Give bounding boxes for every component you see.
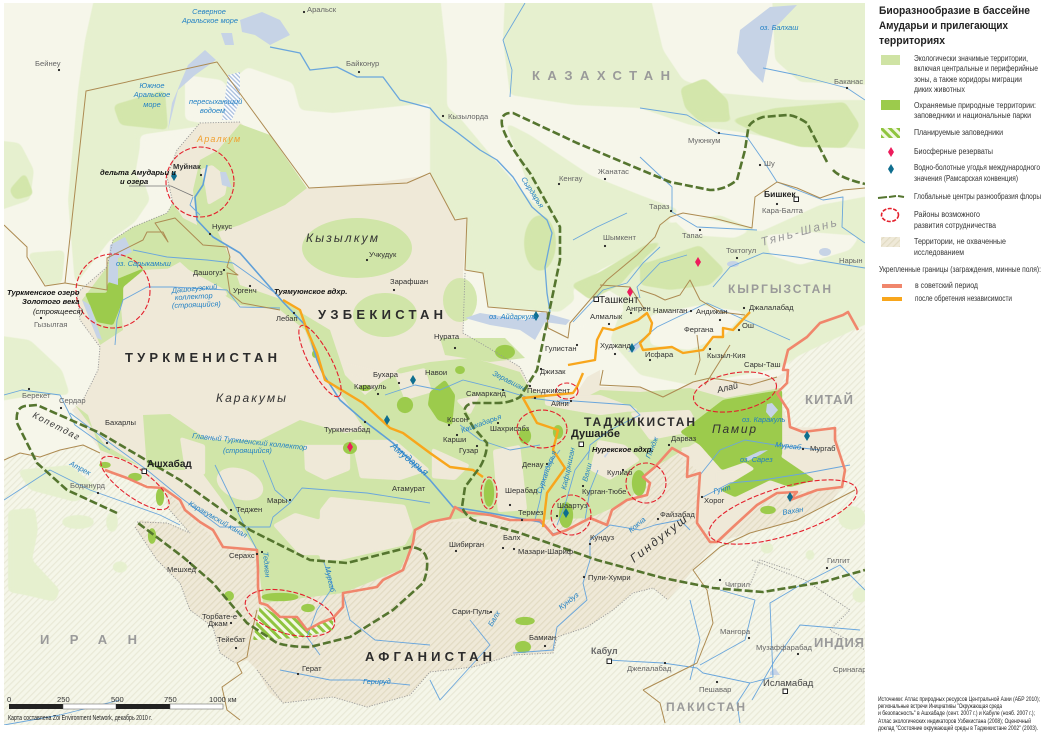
- city labels: Лебап: [276, 314, 298, 323]
- city labels: Нукус: [212, 222, 232, 231]
- city labels: Сари-Пуль: [452, 607, 490, 616]
- city labels: Кенгау: [559, 174, 583, 183]
- water labels: оз. Балхаш: [760, 23, 798, 32]
- city labels: Сердар: [59, 396, 86, 405]
- inner kyzylkum green: [302, 218, 477, 337]
- city markers: [28, 11, 848, 683]
- legend item: ecologically significant: диких животных: [914, 85, 965, 94]
- water labels: водоем: [200, 106, 225, 115]
- country names: АФГАНИСТАН: [365, 649, 492, 664]
- water labels: оз. Сарыкамыш: [116, 259, 171, 268]
- city labels: Герат: [302, 664, 322, 673]
- water labels: (строящийся): [223, 446, 272, 455]
- city labels: Кундуз: [590, 533, 615, 542]
- city labels: Исламабад: [763, 678, 814, 689]
- water labels: Сырдарья: [519, 175, 546, 210]
- city labels: Бамиан: [529, 633, 556, 642]
- water labels: Атрек: [67, 458, 93, 478]
- city labels: Шахрисабз: [490, 424, 530, 433]
- legend item: biosphere reserves: [888, 147, 993, 157]
- region names: Тянь-Шань: [759, 215, 838, 249]
- projects labels: Золотого века: [22, 297, 79, 306]
- city labels: Нурата: [434, 332, 460, 341]
- legend item: protected areas: заповедники и национальные парки: [914, 111, 1031, 120]
- city labels: Байконур: [346, 59, 379, 68]
- legend item: not studied: Территории, не охваченные: [914, 237, 1006, 246]
- region names: Каракумы: [216, 391, 286, 405]
- region names: Памир: [712, 422, 756, 436]
- protected areas bright green: [85, 267, 815, 653]
- city labels: Джелалабад: [627, 664, 672, 673]
- city labels: Файзабад: [660, 510, 695, 519]
- water labels: [67, 7, 804, 686]
- projects labels: дельта Амударьи и: [100, 168, 176, 177]
- city labels: Навои: [425, 368, 447, 377]
- city labels: Мешхед: [167, 565, 196, 574]
- city labels: Фергана: [684, 325, 714, 334]
- city labels: Токтогул: [726, 246, 756, 255]
- city labels: Боджнурд: [70, 481, 106, 490]
- biosphere reserves: [347, 257, 701, 452]
- city labels: Гузар: [459, 446, 478, 455]
- legend item: cooperation areas: [882, 208, 996, 230]
- city labels: Термез: [518, 508, 544, 517]
- region names: [31, 215, 838, 565]
- legend title: Биоразнообразие в бассейне: [879, 5, 1030, 17]
- projects labels: Нурекское вдхр.: [592, 445, 654, 454]
- water labels: Вахан: [782, 504, 804, 517]
- legend item: planned reserves: Планируемые заповедники: [914, 128, 1003, 137]
- legend item: independent fortified: после обретения независимости: [915, 294, 1012, 303]
- city labels: Балх: [503, 533, 521, 542]
- city labels: Шибирган: [449, 540, 484, 549]
- water labels: Кафирниган: [559, 447, 577, 490]
- city labels: Туркменабад: [324, 425, 371, 434]
- city labels: Денау: [522, 460, 544, 469]
- cream clearings: [135, 75, 860, 350]
- water labels: Теджен: [261, 551, 272, 578]
- city labels: Дарваз: [671, 434, 697, 443]
- projects labels: [7, 168, 654, 454]
- city labels: Самарканд: [466, 389, 506, 398]
- water labels: Мургаб: [323, 566, 337, 594]
- water labels: Амударья: [387, 440, 431, 479]
- water labels: Главный Туркменский коллектор: [192, 431, 308, 452]
- desert clearings: [108, 165, 843, 560]
- city labels: Ангрен: [626, 304, 651, 313]
- water labels: Кокча: [627, 515, 647, 535]
- scale bar: 250: [57, 695, 70, 704]
- city labels: Торбате-е: [202, 612, 237, 621]
- city labels: Муюнкум: [688, 136, 720, 145]
- lakes: [82, 5, 831, 675]
- city labels: Худжанд: [600, 341, 631, 350]
- water labels: Аральское море: [181, 16, 238, 25]
- city labels: Карши: [443, 435, 466, 444]
- region names: Гиндукуш: [627, 512, 689, 565]
- city labels: Шымкент: [603, 233, 636, 242]
- legend item: ecologically significant: [881, 54, 1038, 94]
- water labels: Южное: [140, 81, 164, 90]
- pale green zones: [0, 0, 875, 603]
- country names: КИТАЙ: [805, 392, 853, 407]
- city labels: Мазари-Шариф: [518, 547, 573, 556]
- city labels: Айни: [551, 399, 569, 408]
- legend item: soviet fortified: в советский период: [915, 281, 978, 290]
- country names: ТАДЖИКИСТАН: [584, 415, 695, 429]
- legend item: not studied: [881, 237, 1006, 257]
- water labels: оз. Айдаркуль: [489, 312, 537, 321]
- legend item: ecologically significant: Экологически значимые территории,: [914, 54, 1028, 63]
- city labels: Шерабад: [505, 486, 538, 495]
- aral delta leader: [129, 186, 193, 196]
- legend item: planned reserves: [881, 128, 1003, 138]
- legend item: soviet fortified: [882, 281, 978, 290]
- fortified borders after independence: [283, 300, 750, 527]
- legend item: not studied: исследованием: [914, 248, 964, 257]
- scale bar: 1000 км: [209, 695, 237, 704]
- city labels: Бухара: [373, 370, 399, 379]
- legend item: protected areas: Охраняемые природные территории:: [914, 101, 1036, 110]
- country names: КАЗАХСТАН: [532, 68, 670, 83]
- afghan hatched study area: [135, 448, 717, 707]
- city labels: Муйнак: [173, 162, 201, 171]
- city labels: Джизак: [540, 367, 566, 376]
- city labels: Мары: [267, 496, 287, 505]
- planned reserves: [253, 605, 333, 640]
- legend item: independent fortified: [882, 294, 1012, 303]
- city labels: Музаффарабад: [756, 643, 812, 652]
- city labels: Теджен: [236, 505, 262, 514]
- city labels: Пешавар: [699, 685, 731, 694]
- legend item: biosphere reserves: Биосферные резерваты: [914, 147, 993, 156]
- city labels: Ашхабад: [147, 458, 192, 470]
- region names: Кызылкум: [306, 231, 378, 245]
- water labels: Кундуз: [557, 590, 581, 612]
- city labels: Алмалык: [590, 312, 623, 321]
- city labels: Шаартуз: [557, 501, 588, 510]
- city labels: Учкудук: [369, 250, 397, 259]
- projects labels: и озера: [120, 177, 148, 186]
- country names: ИНДИЯ: [814, 635, 864, 650]
- water labels: Герируд: [363, 677, 391, 686]
- region names: Алай: [715, 380, 739, 395]
- city labels: Атамурат: [392, 484, 426, 493]
- city labels: Дашогуз: [193, 268, 223, 277]
- water labels: Аралкум: [196, 134, 241, 144]
- legend title: Амударьи и прилегающих: [879, 20, 1009, 32]
- base land: [4, 3, 865, 458]
- city labels: Косон: [447, 415, 468, 424]
- ecologically significant territories: [75, 124, 780, 603]
- legend: [878, 5, 1041, 303]
- water labels: Сурхандарья: [534, 450, 558, 495]
- water labels: Северное: [192, 7, 226, 16]
- city labels: Чигрил: [725, 580, 750, 589]
- country names: [40, 68, 864, 714]
- city labels: Бахарлы: [105, 418, 136, 427]
- water labels: Пяндж: [644, 435, 661, 460]
- water labels: Зеравшан: [491, 369, 526, 393]
- scale bar: [7, 697, 236, 710]
- map credit: Карта составлена Zoi Environment Network, декабрь 2010 г.: [8, 714, 152, 722]
- scale bar: 0: [7, 695, 11, 704]
- country names: ПАКИСТАН: [666, 700, 745, 714]
- legend item: ramsar wetlands: значения (Рамсарская конвенция): [914, 174, 1018, 183]
- scale bar: 500: [111, 695, 124, 704]
- city labels: Кара-Балта: [762, 206, 804, 215]
- city labels: Серахс: [229, 551, 255, 560]
- water labels: (строящийся): [172, 299, 221, 310]
- city labels: Ош: [742, 321, 754, 330]
- city labels: Кабул: [591, 646, 618, 656]
- city labels: Бишкек: [764, 189, 796, 199]
- city labels: Наманган: [653, 306, 687, 315]
- water labels: Балх: [486, 609, 502, 628]
- fortified borders soviet period: [105, 312, 858, 630]
- water labels: Гунт: [712, 483, 732, 496]
- global flora diversity centers: [17, 113, 865, 647]
- city labels: Пули-Хумри: [588, 573, 631, 582]
- city labels: Тапас: [682, 231, 703, 240]
- dotted study area boundary: [77, 122, 865, 707]
- legend item: protected areas: [881, 100, 1036, 120]
- legend item: ramsar wetlands: [888, 163, 1040, 183]
- projects labels: Туямуюнское вдхр.: [274, 287, 347, 296]
- national borders: [4, 62, 865, 723]
- water labels: Аральское: [133, 90, 170, 99]
- city labels: Хорог: [704, 496, 725, 505]
- city labels: Гызылгая: [34, 320, 67, 329]
- city labels: Сары-Таш: [744, 360, 781, 369]
- ramsar wetlands: [171, 171, 810, 518]
- hatched outer territories: [0, 312, 875, 735]
- city labels: Кулиаб: [607, 468, 633, 477]
- water labels: Вахш: [580, 462, 594, 483]
- city labels: Кызылорда: [448, 112, 489, 121]
- city labels: Мургаб: [810, 444, 836, 453]
- projects labels: (строящееся): [33, 307, 84, 316]
- water labels: море: [143, 100, 161, 109]
- city labels: Гилгит: [827, 556, 850, 565]
- scale bar: 750: [164, 695, 177, 704]
- city labels: Гулистан: [545, 344, 577, 353]
- city labels: Жанатас: [598, 167, 629, 176]
- city labels: Андижан: [696, 307, 727, 316]
- legend title: территориях: [879, 35, 946, 47]
- city labels: [22, 5, 866, 694]
- city labels: Пенджикент: [527, 386, 570, 395]
- city labels: Мангора: [720, 627, 751, 636]
- city labels: Зарафшан: [390, 277, 428, 286]
- city labels: Шу: [764, 159, 775, 168]
- water labels: Кашкадарья: [460, 412, 503, 435]
- sources: [878, 695, 1040, 732]
- city labels: Кызыл-Кия: [707, 351, 746, 360]
- region names: Копетдаг: [31, 410, 82, 442]
- city labels: Берекет: [22, 391, 51, 400]
- legend item: ecologically significant: зоны, а также коридоры миграции: [914, 75, 1022, 84]
- city labels: Баканас: [834, 77, 863, 86]
- water labels: оз. Сарез: [740, 455, 773, 464]
- projects labels: Туркменское озеро: [7, 288, 80, 297]
- country names: ИРАН: [40, 632, 137, 647]
- country names: ТУРКМЕНИСТАН: [125, 350, 277, 365]
- city labels: Ургенч: [233, 286, 257, 295]
- medium green patches north: [9, 78, 860, 300]
- city labels: Душанбе: [571, 428, 620, 440]
- country names: УЗБЕКИСТАН: [318, 307, 443, 322]
- city labels: Ташкент: [599, 295, 639, 306]
- city labels: Бейнеу: [35, 59, 61, 68]
- city labels: Джалалабад: [749, 303, 794, 312]
- country names: КЫРГЫЗСТАН: [728, 282, 831, 296]
- legend item: cooperation areas: Районы возможного: [914, 210, 980, 219]
- legend item: cooperation areas: развития сотрудничества: [914, 221, 996, 230]
- legend title: [879, 5, 1030, 47]
- drying lakebed: [222, 72, 240, 120]
- city labels: Каракуль: [354, 382, 387, 391]
- wakhan hatched area: [717, 487, 842, 542]
- capital markers: [142, 197, 798, 694]
- city labels: Джам: [208, 619, 228, 628]
- water labels: пересыхающий: [189, 97, 242, 106]
- city labels: Нарын: [839, 256, 863, 265]
- cooperation areas: [76, 147, 864, 645]
- water labels: Каракумский канал: [187, 499, 250, 540]
- city labels: Аральск: [307, 5, 337, 14]
- water labels: Дашогузский: [170, 282, 218, 295]
- city labels: Сринагар: [833, 665, 866, 674]
- study area: [72, 122, 845, 603]
- water labels: Мургаб: [775, 440, 802, 452]
- water labels: оз. Каракуль: [742, 415, 786, 424]
- city labels: Исфара: [645, 350, 674, 359]
- city labels: Тараз: [649, 202, 670, 211]
- sources: региональные встречи Инициативы "Окружающая среда: [878, 703, 1002, 710]
- city labels: Тейебат: [217, 635, 246, 644]
- city labels: Курган-Тюбе: [582, 487, 626, 496]
- water labels: коллектор: [175, 291, 213, 302]
